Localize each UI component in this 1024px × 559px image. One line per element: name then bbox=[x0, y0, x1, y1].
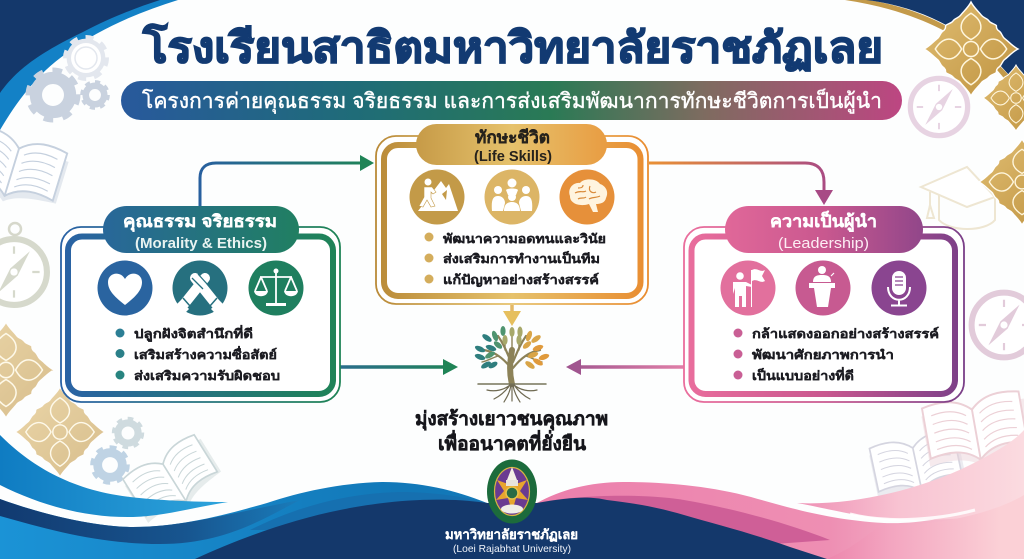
footer wave: lower pink bbox=[827, 495, 1024, 559]
decor: compass right bbox=[972, 293, 1024, 357]
icon: brain bbox=[560, 170, 614, 224]
heading pill: leadership bbox=[725, 206, 923, 253]
decor: books bottom-right bbox=[867, 389, 1024, 505]
decor: thai flower right middle bbox=[983, 65, 1024, 131]
heading pill: morality: (Morality & Ethics) bbox=[135, 235, 267, 252]
arrow: life skills to tree bbox=[503, 305, 521, 326]
subtitle banner bbox=[121, 81, 902, 120]
bullet list: life skills: ส่งเสริมการทำงานเป็นทีม bbox=[443, 251, 600, 266]
icon: heart bbox=[98, 260, 152, 316]
bullet list: life skills: แก้ปัญหาอย่างสร้างสรรค์ bbox=[443, 272, 599, 287]
icon: team meeting bbox=[484, 170, 540, 224]
footer wave: navy base bbox=[195, 498, 827, 559]
goal text: เพื่ออนาคตที่ยั่งยืน bbox=[438, 430, 586, 455]
panel: leadership bbox=[684, 206, 964, 402]
arrow: morality to life skills bbox=[200, 155, 374, 206]
footer wave: mid-blue layer bbox=[250, 492, 487, 530]
footer: university name: (Loei Rajabhat University) bbox=[453, 543, 571, 555]
heading pill: life skills: (Life Skills) bbox=[474, 148, 552, 165]
goal text bbox=[415, 408, 608, 455]
arrow: life skills to leadership bbox=[649, 163, 833, 205]
icon: person with flag bbox=[720, 260, 776, 316]
decor: thai flower right lower bbox=[979, 139, 1024, 225]
decor: gears top-left bbox=[29, 38, 108, 119]
decor: book top-left bbox=[0, 123, 71, 216]
footer wave: dark blue band bbox=[0, 499, 300, 544]
heading pill: morality: คุณธรรม จริยธรรม bbox=[123, 212, 277, 232]
logo: university seal bbox=[487, 460, 537, 524]
top-left navy wave bbox=[0, 0, 160, 93]
title: โรงเรียนสาธิตมหาวิทยาลัยราชภัฏเลย bbox=[142, 23, 883, 71]
icon: tree bbox=[474, 326, 550, 402]
decor: thai flower top right bbox=[924, 2, 1018, 96]
subtitle banner: โครงการค่ายคุณธรรม จริยธรรม และการส่งเสริมพัฒนาการทักษะชีวิตการเป็นผู้นำ bbox=[142, 87, 882, 114]
decor: book bottom-left bbox=[120, 431, 227, 529]
bullet list: leadership: พัฒนาศักยภาพการนำ bbox=[752, 348, 894, 362]
heading pill: life skills bbox=[416, 124, 607, 165]
heading pill: life skills: ทักษะชีวิต bbox=[475, 127, 550, 147]
bullet list: morality: ปลูกฝังจิตสำนึกที่ดี bbox=[134, 325, 253, 342]
footer wave: pink dark layer bbox=[537, 496, 830, 545]
top-left blue wave bbox=[0, 0, 178, 130]
decor: compass left bbox=[0, 223, 47, 305]
bullet list: morality: ส่งเสริมความรับผิดชอบ bbox=[134, 369, 280, 383]
icon: scales bbox=[248, 260, 304, 316]
bullet list: life skills bbox=[424, 232, 606, 287]
footer: university name: มหาวิทยาลัยราชภัฏเลย bbox=[445, 527, 578, 543]
bullet list: morality: เสริมสร้างความซื่อสัตย์ bbox=[134, 346, 277, 362]
footer wave: left blue bbox=[0, 482, 512, 559]
footer wave: pale pink wedge bbox=[797, 430, 1024, 520]
panel: life skills bbox=[376, 124, 648, 304]
bullet list: morality bbox=[116, 325, 280, 383]
top-right navy wave bbox=[866, 0, 1024, 96]
bullet list: leadership: กล้าแสดงออกอย่างสร้างสรรค์ bbox=[752, 326, 939, 341]
bullet list: leadership: เป็นแบบอย่างที่ดี bbox=[752, 367, 854, 383]
footer: university name bbox=[445, 527, 578, 555]
decor: thai flower lower left bbox=[15, 387, 105, 477]
icon: handshake bbox=[172, 260, 228, 316]
icon: hiker on mountain bbox=[410, 170, 464, 224]
heading pill: leadership: ความเป็นผู้นำ bbox=[770, 209, 877, 233]
decor: graduation cap bbox=[921, 167, 995, 229]
decor: compass top right bbox=[910, 78, 968, 136]
top-right gold curve bbox=[845, 0, 1024, 112]
arrow: morality to tree bbox=[340, 359, 458, 375]
bullet list: leadership bbox=[734, 326, 939, 383]
footer wave: pink main bbox=[537, 482, 1024, 559]
arrow: leadership to tree bbox=[566, 359, 684, 375]
heading pill: leadership: (Leadership) bbox=[778, 235, 869, 252]
footer wave: left light-blue wedge bbox=[0, 435, 228, 517]
icon: speaker at podium bbox=[796, 260, 850, 316]
panel: morality and ethics bbox=[61, 206, 340, 402]
icon: microphone bbox=[872, 260, 926, 316]
decor: thai flower left bbox=[0, 322, 54, 418]
bullet list: life skills: พัฒนาความอดทนและวินัย bbox=[443, 232, 606, 246]
footer wave: white highlight bbox=[850, 510, 975, 520]
goal text: มุ่งสร้างเยาวชนคุณภาพ bbox=[415, 408, 608, 431]
heading pill: morality bbox=[103, 206, 299, 253]
decor: gears bottom-left bbox=[92, 419, 142, 483]
